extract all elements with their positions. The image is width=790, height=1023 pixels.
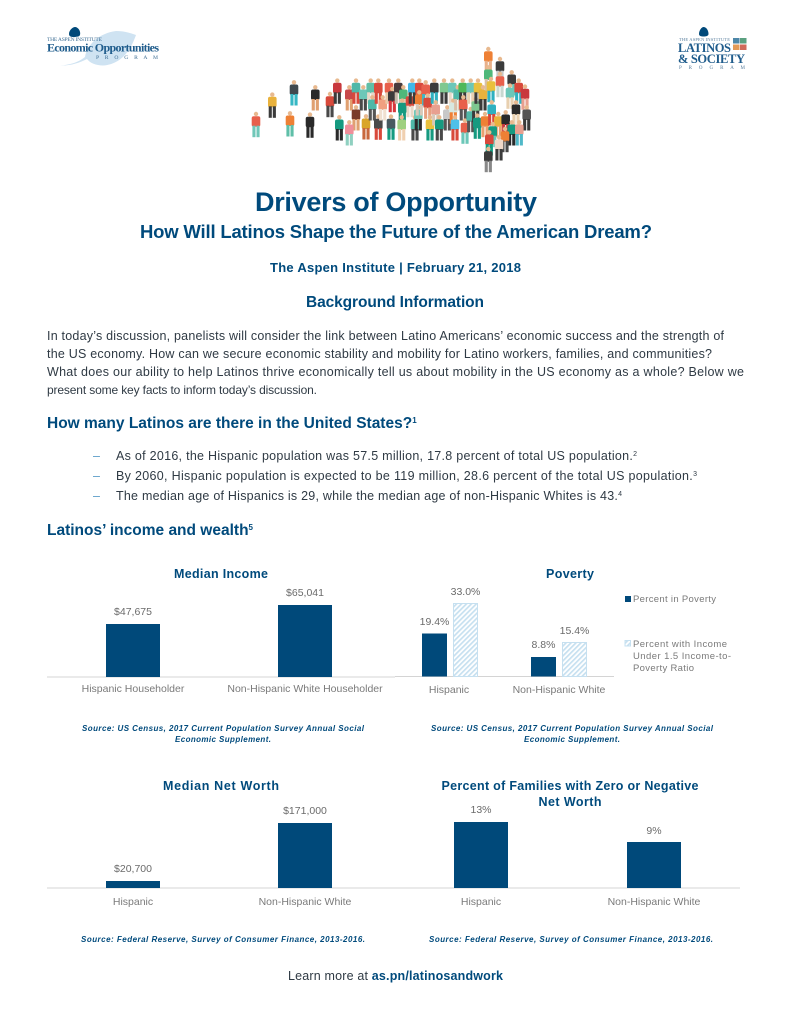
footer link: Learn more at as.pn/latinosandwork: [288, 969, 503, 983]
chart: poverty: 19.4%: [420, 616, 449, 628]
chart: families with zero or negative net worth: Hispanic: [461, 896, 501, 908]
logo: Latinos and Society Program: & SOCIETY: [678, 52, 745, 66]
chart: median income: $65,041: [286, 587, 324, 599]
text block: introduction: the US economy. How can we secure economic stability and mobility for Latino workers, families, and communities?: [47, 347, 712, 361]
chart: poverty: 8.8%: [532, 639, 555, 651]
illustration: arrow formed by a crowd of people: [252, 47, 531, 172]
title: Drivers of Opportunity: [255, 187, 537, 217]
chart: median net worth: Median Net Worth: [163, 779, 279, 793]
logo: Economic Opportunities Program: [47, 27, 159, 66]
chart: median income: Median Income: [174, 567, 268, 581]
logo: Latinos and Society Program: P R O G R A M: [679, 66, 746, 71]
chart: median net worth: [47, 779, 395, 908]
source: families net worth: Source: Federal Reserve, Survey of Consumer Finance, 2013-2016.: [429, 935, 713, 944]
logo: Latinos and Society Program: LATINOS: [678, 41, 731, 55]
source: poverty: [431, 724, 714, 744]
chart: median net worth: Hispanic: [113, 896, 153, 908]
heading: Latinos' income and wealth: Latinos’ income and wealth: [47, 522, 249, 539]
source: median income: Economic Supplement.: [175, 735, 271, 744]
bullet list: population facts: 2: [633, 451, 637, 458]
text block: introduction: What does our ability to help Latinos thrive economically tell us about mobility in the US economy as a whole? Below we: [47, 365, 744, 379]
text block: introduction: In today’s discussion, panelists will consider the link between Latino Americans’ economic success and the strength of: [47, 329, 725, 343]
logo: Latinos and Society Program: [678, 27, 746, 71]
source: median income: [82, 724, 365, 744]
legend: poverty: Under 1.5 Income-to-: [633, 651, 731, 662]
heading: Latinos' income and wealth: 5: [249, 523, 254, 532]
chart: families with zero or negative net worth: Percent of Families with Zero or Negative: [442, 779, 699, 793]
legend: poverty: [625, 594, 731, 674]
source: net worth: Source: Federal Reserve, Survey of Consumer Finance, 2013-2016.: [81, 935, 365, 944]
chart: median income: $47,675: [114, 606, 152, 618]
chart: poverty: [395, 567, 614, 696]
bullet list: population facts: The median age of Hispanics is 29, while the median age of non-Hispanic Whites is 43.: [116, 489, 618, 503]
legend: poverty: Percent in Poverty: [633, 594, 716, 605]
logo: Economic Opportunities Program: Economic Opportunities: [47, 40, 159, 54]
logo: Latinos and Society Program: THE ASPEN INSTITUTE: [679, 37, 730, 42]
bullet list: population facts: As of 2016, the Hispanic population was 57.5 million, 17.8 percent of total US population.: [116, 449, 633, 463]
source: poverty: Economic Supplement.: [524, 735, 620, 744]
bullet list: population facts: [93, 449, 697, 503]
legend: poverty: Percent with Income: [633, 639, 727, 650]
heading: Background Information: Background Information: [306, 294, 484, 311]
chart: families with zero or negative net worth: Non-Hispanic White: [608, 896, 701, 908]
bullet list: population facts: 4: [618, 491, 622, 498]
chart: families with zero or negative net worth: [395, 779, 740, 908]
chart: median net worth: $171,000: [283, 805, 327, 817]
heading: How many Latinos: How many Latinos are there in the United States?: [47, 415, 412, 432]
chart: median net worth: $20,700: [114, 863, 152, 875]
bullet list: population facts: By 2060, Hispanic population is expected to be 119 million, 28.6 percent of the total US population.: [116, 469, 693, 483]
chart: families with zero or negative net worth: 9%: [646, 825, 662, 837]
chart: poverty: 33.0%: [451, 586, 480, 598]
bullet list: population facts: –: [93, 449, 100, 463]
chart: families with zero or negative net worth: 13%: [470, 804, 492, 816]
logo: Economic Opportunities Program: P R O G R A M: [96, 55, 158, 61]
chart: poverty: Non-Hispanic White: [513, 684, 606, 696]
logo: Economic Opportunities Program: THE ASPEN INSTITUTE: [47, 37, 103, 43]
bullet list: population facts: –: [93, 489, 100, 503]
bullet list: population facts: 3: [693, 471, 697, 478]
heading: How many Latinos: 1: [412, 416, 417, 425]
chart: median net worth: Non-Hispanic White: [259, 896, 352, 908]
source: poverty: Source: US Census, 2017 Current Population Survey Annual Social: [431, 724, 714, 733]
chart: median income: [47, 567, 395, 695]
bullet list: population facts: –: [93, 469, 100, 483]
chart: median income: Hispanic Householder: [82, 683, 185, 695]
chart: median income: Non-Hispanic White Householder: [227, 683, 383, 695]
legend: poverty: Poverty Ratio: [633, 663, 694, 674]
chart: poverty: Hispanic: [429, 684, 469, 696]
text block: introduction: present some key facts to inform today’s discussion.: [47, 383, 317, 397]
source: median income: Source: US Census, 2017 Current Population Survey Annual Social: [82, 724, 365, 733]
chart: poverty: 15.4%: [560, 625, 589, 637]
subtitle: How Will Latinos Shape the Future of the American Dream?: [140, 221, 652, 242]
text block: introduction: [47, 329, 744, 397]
event line: The Aspen Institute | February 21, 2018: [270, 260, 521, 275]
chart: families with zero or negative net worth: Net Worth: [538, 795, 602, 809]
chart: poverty: Poverty: [546, 567, 594, 581]
